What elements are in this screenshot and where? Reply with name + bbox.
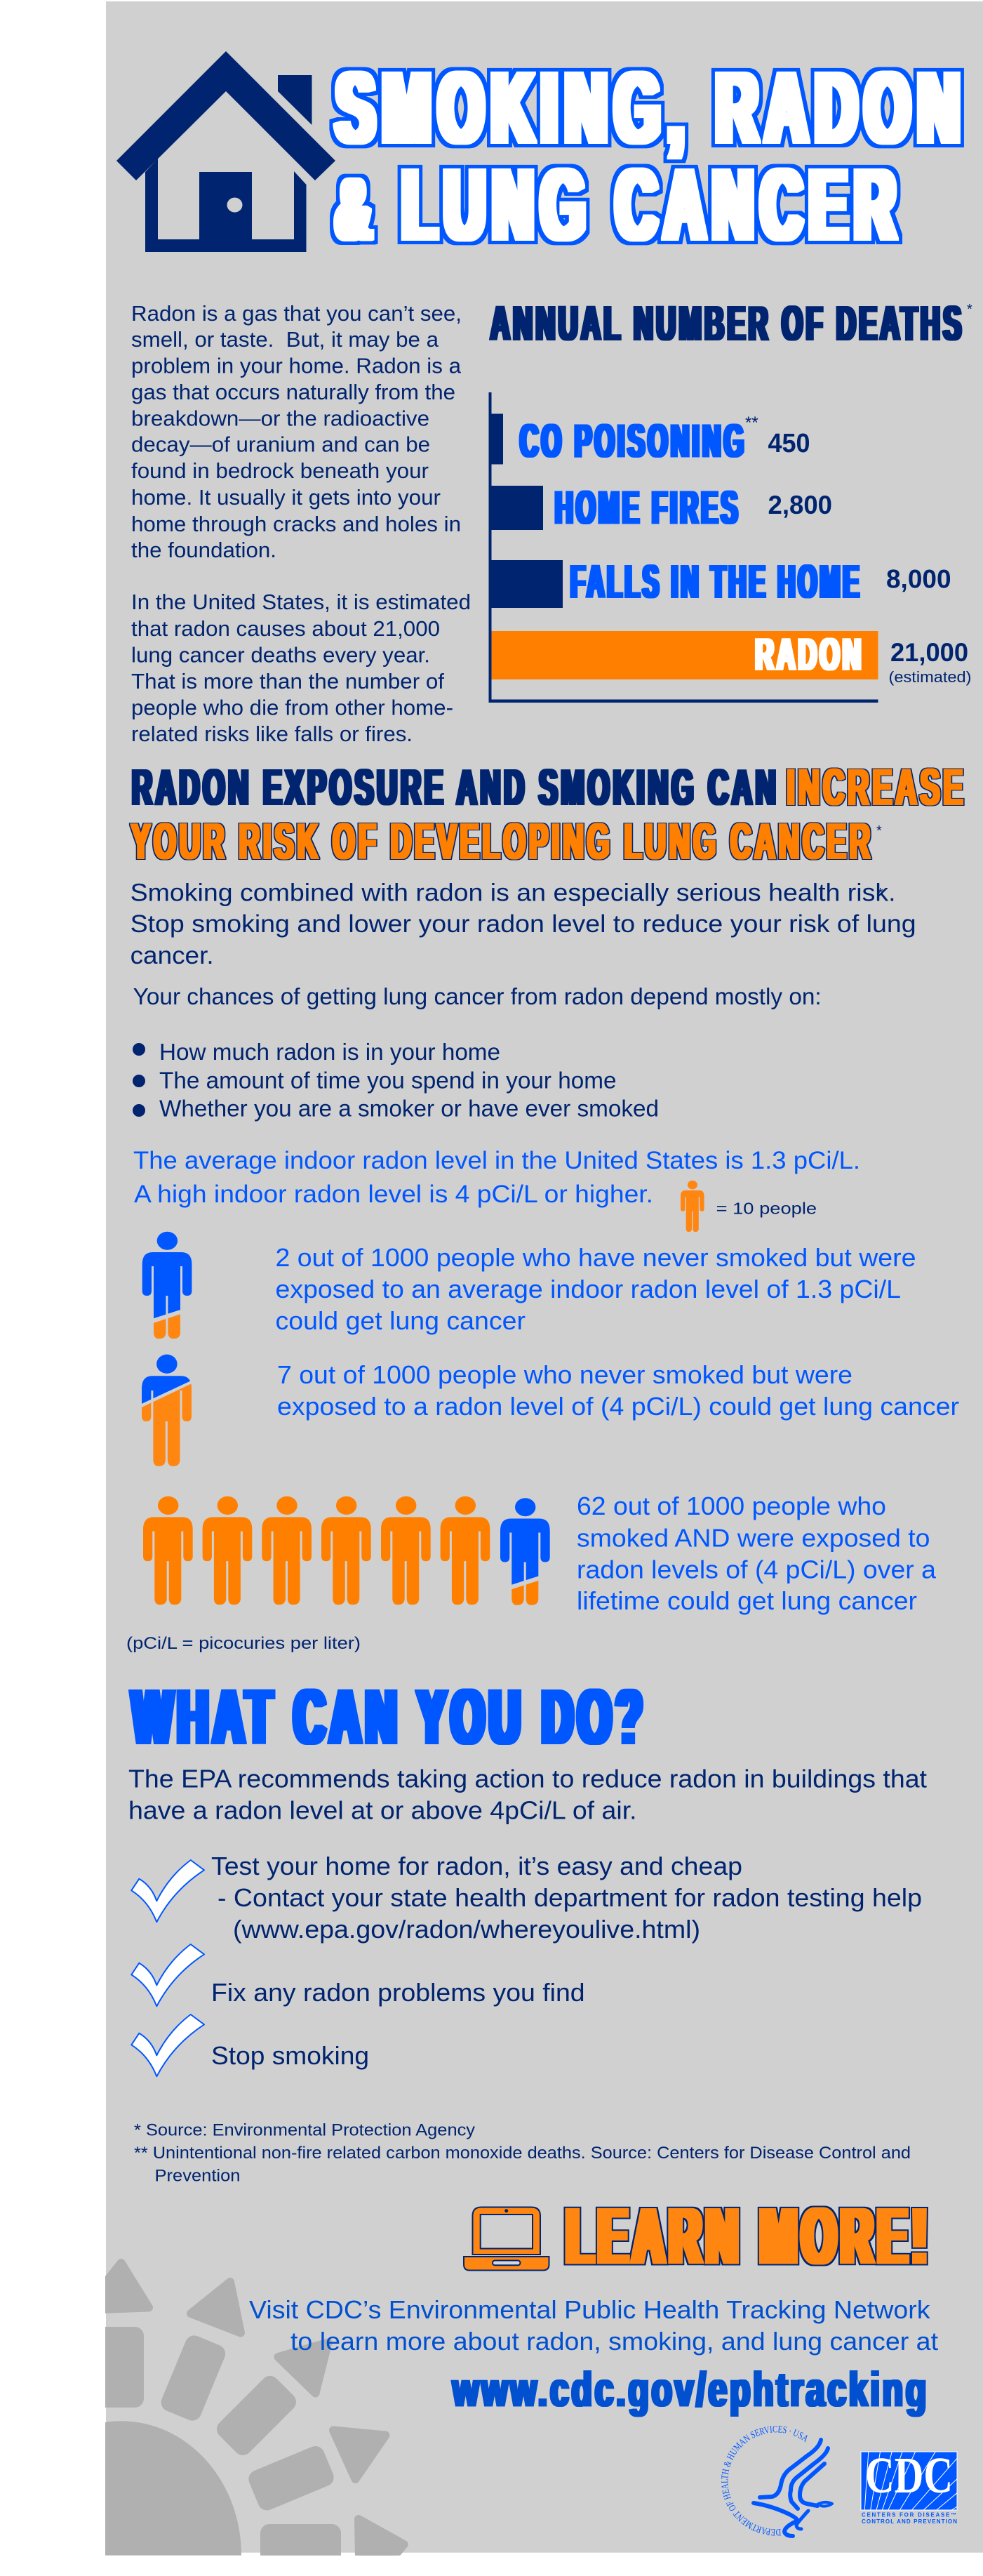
text: 2 out of 1000 [275,1243,916,1335]
text: EPA recommendation: The EPA recommends taking action to reduce radon in buildings that [128,1765,927,1793]
bar: CO poisoning: ** [745,413,758,432]
icon: person part blue part orange, 7 of 1000 [142,1355,192,1466]
checklist item: test your home: (www.epa.gov/radon/whereyoulive.html) [233,1915,700,1944]
text: 7 out of 1000: 7 out of 1000 people who never smoked but were [277,1360,852,1389]
footnotes: Prevention [154,2166,240,2186]
footnotes [134,2121,911,2186]
intro text: related risks like falls or fires. [131,722,413,746]
text: 62 out of 1000: smoked AND were exposed to [577,1523,930,1553]
bar: home fires [490,482,832,534]
text: 62 out of 1000: 62 out of 1000 people who [577,1492,886,1520]
paragraph: smoking combined with radon: Smoking combined with radon is an especially serious health risk. [131,879,896,907]
text: 2 out of 1000: exposed to an average indoor radon level of 1.3 pCi/L [275,1275,901,1303]
checklist item: test your home: Test your home for radon, it’s easy and cheap [211,1852,742,1880]
checklist item: test your home [131,1852,922,1944]
logo: HHS: DEPARTMENT OF HEALTH & HUMAN SERVICES · USA [721,2426,808,2535]
legend: one figure equals 10 people [681,1181,817,1232]
stray footnote mark: * [878,886,883,901]
text: 62 out of 1000: lifetime could get lung cancer [577,1586,917,1615]
icon: house [116,51,335,252]
intro text: home. It usually it gets into your [131,485,441,510]
icon: laptop [464,2207,549,2270]
text: 7 out of 1000: exposed to a radon level of (4 pCi/L) could get lung cancer [277,1392,959,1421]
text: visit CDC: to learn more about radon, smoking, and lung cancer at [290,2327,938,2356]
text: 62 out of 1000 [577,1492,937,1615]
icon: person mostly blue, 2 of 1000 [142,1232,192,1339]
title [336,51,968,261]
footnotes: * Source: Environmental Protection Agency [134,2121,475,2140]
bar: home fires: 2,800 [768,491,832,519]
bar: radon: (estimated) [888,668,971,686]
bar: radon: 21,000 [890,638,968,667]
intro text: problem in your home. Radon is a [131,354,462,378]
checklist item: fix problems [131,1944,585,2007]
intro text: smell, or taste. But, it may be a [131,327,439,352]
intro text: found in bedrock beneath your [131,458,429,483]
text: visit CDC: Visit CDC’s Environmental Public Health Tracking Network [249,2295,931,2324]
intro text: home through cracks and holes in [131,512,461,536]
intro text [131,301,471,746]
decorative sun graphic [91,2263,404,2566]
logo: CDC: CONTROL AND PREVENTION [862,2518,957,2525]
checklist item: stop smoking: Stop smoking [211,2041,369,2070]
bullet list: The amount of time you spend in your home [159,1067,616,1094]
text: 7 out of 1000 [277,1360,959,1421]
bar: radon: RADON [755,628,864,679]
bar: radon [491,628,971,686]
logo: CDC: CDC [865,2447,953,2504]
intro text: that radon causes about 21,000 [131,616,440,641]
bar: falls in the home: 8,000 [886,564,951,594]
text: average radon level: The average indoor radon level in the United States is 1.3 pCi/L. [133,1147,860,1174]
pictogram: 62 of 1000 [143,1496,550,1605]
text: EPA recommendation: have a radon level at or above 4pCi/L of air. [128,1796,637,1825]
bar: CO poisoning: CO POISONING [520,415,747,467]
logo: CDC: CENTERS FOR DISEASE™ [862,2512,956,2518]
intro text: people who die from other home- [131,695,453,720]
intro text: the foundation. [131,538,276,562]
paragraph: smoking combined with radon [131,879,916,969]
text: average radon level [133,1147,860,1208]
heading footnote mark: * [967,302,972,317]
section heading: radon exposure and smoking [131,759,966,870]
intro text: That is more than the number of [131,669,444,693]
text: average radon level: A high indoor radon level is 4 pCi/L or higher. [134,1181,653,1208]
intro text: In the United States, it is estimated [131,590,471,614]
checklist item: fix problems: Fix any radon problems you find [211,1978,585,2007]
paragraph: smoking combined with radon: Stop smoking and lower your radon level to reduce your risk of lung [131,910,916,938]
bar: CO poisoning: 450 [768,429,810,458]
paragraph: smoking combined with radon: cancer. [131,942,214,969]
intro text: lung cancer deaths every year. [131,643,430,667]
intro text: Radon is a gas that you can’t see, [131,301,462,326]
text: visit CDC [249,2295,938,2356]
checklist item: stop smoking [131,2014,369,2076]
heading footnote mark: * [876,823,882,839]
bar: home fires: HOME FIRES [555,482,741,534]
legend: one figure equals 10 people: = 10 people [716,1199,817,1217]
note: unit definition: (pCi/L = picocuries per liter) [126,1634,361,1653]
intro text: decay—of uranium and can be [131,432,430,456]
intro text: gas that occurs naturally from the [131,380,455,404]
checklist item: test your home: - Contact your state health department for radon testing help [218,1883,922,1912]
intro text: breakdown—or the radioactive [131,406,429,431]
text: 2 out of 1000: 2 out of 1000 people who have never smoked but were [275,1243,916,1272]
bullet list [133,1039,659,1122]
footnotes: ** Unintentional non-fire related carbon monoxide deaths. Source: Centers for Disease Control and [134,2144,911,2163]
text: 2 out of 1000: could get lung cancer [275,1306,526,1335]
bar: CO poisoning [490,413,810,467]
text: EPA recommendation [128,1765,927,1825]
bullet list: How much radon is in your home [159,1039,500,1065]
text: 62 out of 1000: radon levels of (4 pCi/L) over a [577,1555,937,1584]
bar chart: annual deaths [488,392,971,703]
text: chances intro: Your chances of getting lung cancer from radon depend mostly on: [133,983,822,1009]
logo: CDC [861,2447,958,2525]
bullet list: Whether you are a smoker or have ever smoked [159,1095,659,1122]
